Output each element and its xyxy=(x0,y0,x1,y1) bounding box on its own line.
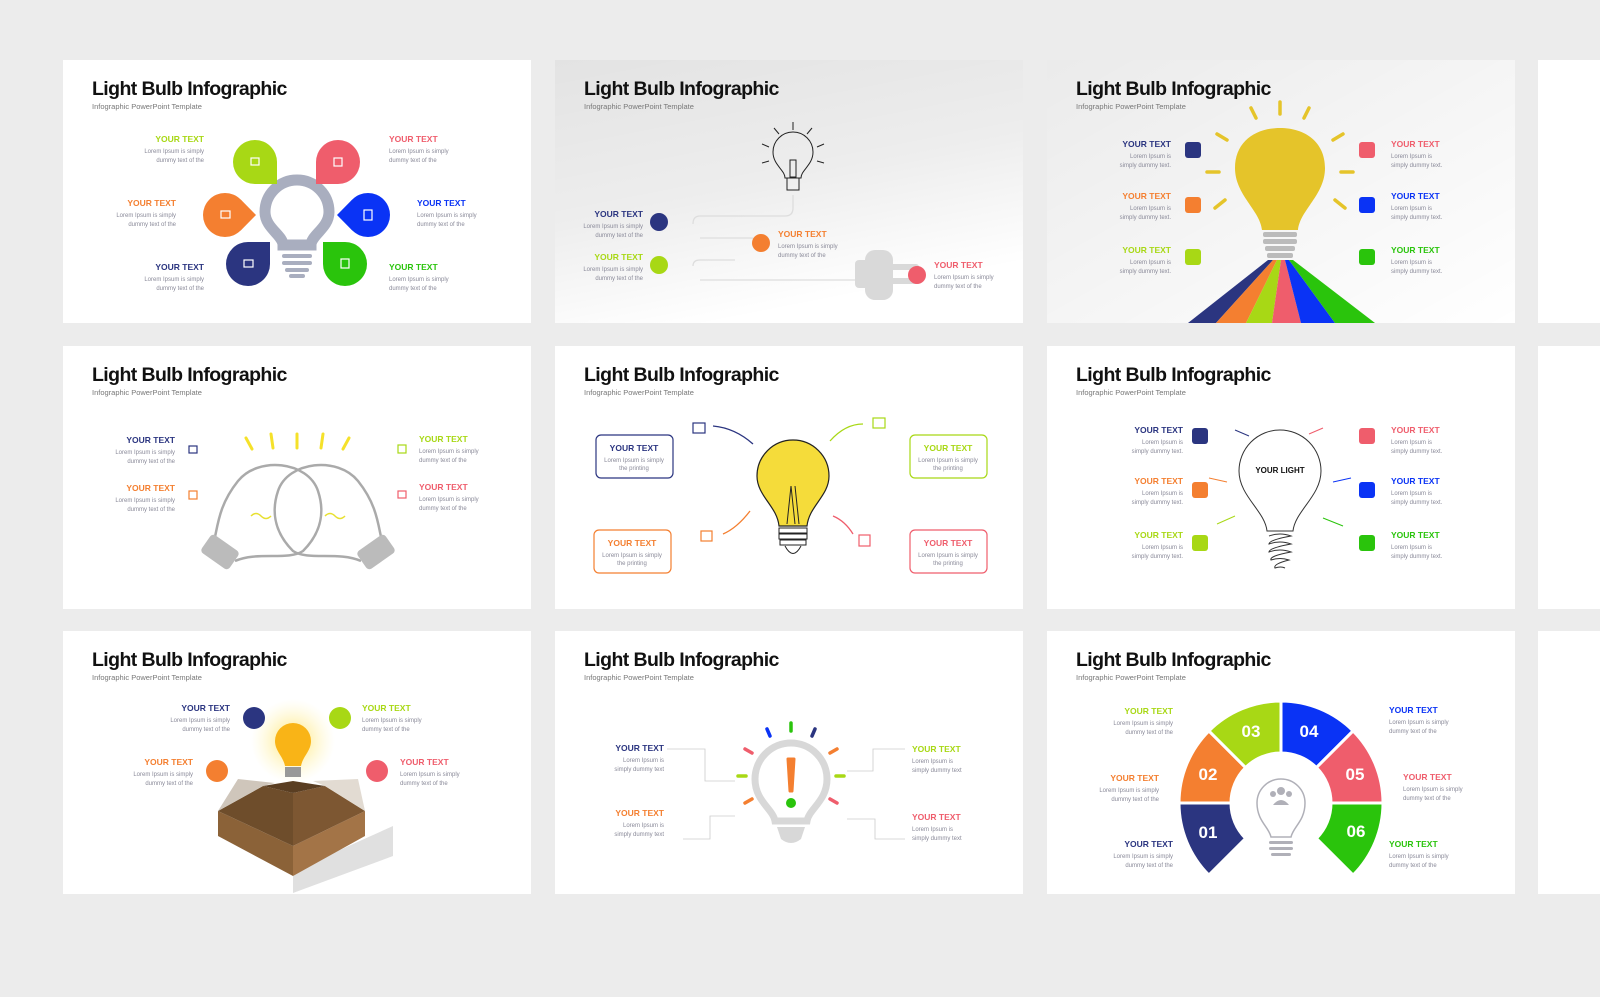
text blocks: Lorem Ipsum is simply xyxy=(144,277,204,283)
text blocks: Lorem Ipsum is xyxy=(912,827,953,833)
text blocks: dummy text of the xyxy=(419,458,467,464)
text blocks: dummy text of the xyxy=(182,727,231,733)
rays xyxy=(738,723,844,803)
outline bulb xyxy=(762,122,824,190)
text blocks xyxy=(1099,705,1463,869)
text blocks: dummy text of the xyxy=(128,222,177,228)
plug xyxy=(855,250,919,300)
text blocks: YOUR TEXT xyxy=(181,703,231,713)
text blocks: simply dummy text xyxy=(912,836,962,842)
slide 8: exclamation bulb xyxy=(555,631,1023,894)
title: Infographic PowerPoint Template xyxy=(92,673,202,682)
text blocks: Lorem Ipsum is xyxy=(1130,260,1171,266)
title: Infographic PowerPoint Template xyxy=(92,102,202,111)
title: Infographic PowerPoint Template xyxy=(584,102,694,111)
text blocks: YOUR TEXT xyxy=(155,262,205,272)
text blocks: simply dummy text. xyxy=(1391,449,1443,455)
text blocks: YOUR TEXT xyxy=(362,703,411,713)
title: Infographic PowerPoint Template xyxy=(1076,102,1186,111)
text blocks: YOUR TEXT xyxy=(1124,706,1174,716)
bulb xyxy=(755,743,827,843)
text blocks: YOUR TEXT xyxy=(1403,772,1452,782)
text blocks: the printing xyxy=(619,466,649,472)
text blocks: the printing xyxy=(933,466,963,472)
text blocks: YOUR TEXT xyxy=(912,744,961,754)
text blocks: YOUR TEXT xyxy=(400,757,449,767)
numbers: 05 xyxy=(1346,765,1364,784)
boxes xyxy=(594,435,987,573)
numbers: 03 xyxy=(1242,722,1260,741)
box xyxy=(218,779,393,893)
text blocks: YOUR TEXT xyxy=(610,443,659,453)
title: Infographic PowerPoint Template xyxy=(1076,388,1186,397)
text blocks: YOUR TEXT xyxy=(389,134,438,144)
squares xyxy=(1192,428,1375,551)
text blocks: YOUR TEXT xyxy=(1134,476,1184,486)
text blocks: YOUR TEXT xyxy=(615,743,665,753)
text blocks: simply dummy text. xyxy=(1120,269,1171,275)
text blocks: Lorem Ipsum is simply xyxy=(417,213,477,219)
text blocks: simply dummy text. xyxy=(1391,215,1443,221)
title xyxy=(584,649,780,682)
text blocks: Lorem Ipsum is simply xyxy=(604,458,664,464)
text blocks xyxy=(602,443,978,567)
text blocks: YOUR TEXT xyxy=(1122,245,1172,255)
text blocks: simply dummy text. xyxy=(1132,449,1183,455)
title: Light Bulb Infographic xyxy=(92,78,288,100)
text blocks: YOUR TEXT xyxy=(615,808,665,818)
slide 1: petal bulb xyxy=(63,60,531,323)
text blocks: YOUR TEXT xyxy=(1122,191,1172,201)
text blocks: dummy text of the xyxy=(778,253,826,259)
slide 3: yellow bulb with rainbow road xyxy=(1047,60,1515,323)
slide 2: bulb with plug xyxy=(555,60,1023,323)
text blocks: Lorem Ipsum is simply xyxy=(1389,720,1449,726)
text blocks: Lorem Ipsum is xyxy=(1391,260,1432,266)
bulb xyxy=(1239,430,1321,568)
text blocks: Lorem Ipsum is xyxy=(1391,545,1432,551)
text blocks: Lorem Ipsum is simply xyxy=(1113,854,1173,860)
squares xyxy=(1185,142,1375,265)
text blocks: YOUR TEXT xyxy=(1124,839,1174,849)
text blocks: YOUR TEXT xyxy=(924,443,973,453)
text blocks xyxy=(614,743,962,842)
text blocks: Lorem Ipsum is simply xyxy=(419,449,479,455)
icons xyxy=(693,418,885,546)
text blocks: Lorem Ipsum is xyxy=(1391,206,1432,212)
text blocks: dummy text of the xyxy=(1125,863,1174,869)
title xyxy=(584,78,780,111)
title: Infographic PowerPoint Template xyxy=(92,388,202,397)
text blocks: Lorem Ipsum is xyxy=(1142,440,1183,446)
text blocks: Lorem Ipsum is simply xyxy=(115,450,175,456)
text blocks: Lorem Ipsum is simply xyxy=(389,277,449,283)
text blocks: simply dummy text xyxy=(912,768,962,774)
glow and bulb xyxy=(251,699,335,783)
center bulb xyxy=(1257,779,1305,856)
numbers: 01 xyxy=(1199,823,1217,842)
text blocks: YOUR TEXT xyxy=(912,812,961,822)
text blocks: dummy text of the xyxy=(156,286,205,292)
rays xyxy=(246,434,349,449)
title xyxy=(92,78,288,111)
text blocks: dummy text of the xyxy=(362,727,410,733)
text blocks: YOUR TEXT xyxy=(417,198,466,208)
text blocks: dummy text of the xyxy=(417,222,465,228)
slide 9: numbered semicircle xyxy=(1047,631,1515,894)
text blocks: Lorem Ipsum is simply xyxy=(419,497,479,503)
text blocks: Lorem Ipsum is xyxy=(1391,154,1432,160)
text blocks: YOUR TEXT xyxy=(1391,530,1440,540)
text blocks: simply dummy text. xyxy=(1391,500,1443,506)
text blocks: simply dummy text. xyxy=(1132,554,1183,560)
text blocks: Lorem Ipsum is simply xyxy=(602,553,662,559)
text blocks: YOUR TEXT xyxy=(126,483,176,493)
text blocks: Lorem Ipsum is simply xyxy=(1113,721,1173,727)
text blocks: simply dummy text. xyxy=(1391,163,1443,169)
text blocks: dummy text of the xyxy=(127,507,176,513)
title: Light Bulb Infographic xyxy=(584,364,780,386)
text blocks: Lorem Ipsum is xyxy=(912,759,953,765)
title: Light Bulb Infographic xyxy=(92,649,288,671)
text blocks: the printing xyxy=(933,561,963,567)
title xyxy=(92,649,288,682)
text blocks: Lorem Ipsum is xyxy=(1142,545,1183,551)
text blocks: YOUR TEXT xyxy=(127,198,177,208)
text blocks: Lorem Ipsum is xyxy=(1391,440,1432,446)
text blocks: YOUR TEXT xyxy=(1134,425,1184,435)
text blocks: dummy text of the xyxy=(1389,729,1437,735)
text blocks: dummy text of the xyxy=(156,158,205,164)
bulbs xyxy=(213,465,383,561)
rainbow road xyxy=(1188,260,1375,323)
text blocks: Lorem Ipsum is simply xyxy=(144,149,204,155)
text blocks: YOUR TEXT xyxy=(144,757,194,767)
text blocks: Lorem Ipsum is simply xyxy=(918,553,978,559)
title xyxy=(1076,649,1272,682)
title xyxy=(1076,78,1272,111)
text blocks: YOUR TEXT xyxy=(1389,705,1438,715)
text blocks: YOUR TEXT xyxy=(1391,476,1440,486)
text blocks: YOUR TEXT xyxy=(1391,425,1440,435)
segments xyxy=(1179,701,1383,875)
text blocks: simply dummy text. xyxy=(1391,554,1443,560)
text blocks: dummy text of the xyxy=(595,233,644,239)
text blocks: Lorem Ipsum is xyxy=(1130,154,1171,160)
numbers xyxy=(1199,722,1365,842)
title: Infographic PowerPoint Template xyxy=(584,388,694,397)
numbers: 04 xyxy=(1300,722,1319,741)
title xyxy=(584,364,780,397)
text blocks: dummy text of the xyxy=(400,781,448,787)
text blocks: simply dummy text. xyxy=(1120,215,1171,221)
circles xyxy=(206,707,388,782)
text blocks: YOUR TEXT xyxy=(419,482,468,492)
text blocks: Lorem Ipsum is xyxy=(1142,491,1183,497)
circles xyxy=(650,213,926,284)
text blocks: YOUR TEXT xyxy=(924,538,973,548)
text blocks: Lorem Ipsum is simply xyxy=(1389,854,1449,860)
text blocks: dummy text of the xyxy=(934,284,982,290)
title: Light Bulb Infographic xyxy=(1076,649,1272,671)
text blocks: YOUR TEXT xyxy=(126,435,176,445)
text blocks xyxy=(583,209,994,290)
title: Light Bulb Infographic xyxy=(1076,78,1272,100)
text blocks: dummy text of the xyxy=(595,276,644,282)
text blocks: Lorem Ipsum is simply xyxy=(583,267,643,273)
text blocks: YOUR TEXT xyxy=(778,229,827,239)
slide 4: two bulbs xyxy=(63,346,531,609)
text blocks: YOUR TEXT xyxy=(594,209,644,219)
text blocks: Lorem Ipsum is simply xyxy=(115,498,175,504)
text blocks: the printing xyxy=(617,561,647,567)
text blocks: dummy text of the xyxy=(1389,863,1437,869)
text blocks xyxy=(115,434,479,513)
title: Light Bulb Infographic xyxy=(1076,364,1272,386)
text blocks: YOUR TEXT xyxy=(608,538,657,548)
text blocks: simply dummy text. xyxy=(1132,500,1183,506)
slide 6: your light outline bulb xyxy=(1047,346,1515,609)
numbers: 02 xyxy=(1199,765,1217,784)
bulb: YOUR LIGHT xyxy=(1255,466,1305,475)
text blocks: YOUR TEXT xyxy=(1391,139,1440,149)
title: Infographic PowerPoint Template xyxy=(584,673,694,682)
text blocks: Lorem Ipsum is simply xyxy=(389,149,449,155)
text blocks: YOUR TEXT xyxy=(1391,245,1440,255)
ray strokes xyxy=(1209,428,1351,526)
text blocks: Lorem Ipsum is xyxy=(1391,491,1432,497)
petals xyxy=(203,140,390,286)
connectors xyxy=(667,749,905,839)
title: Infographic PowerPoint Template xyxy=(1076,673,1186,682)
text blocks: YOUR TEXT xyxy=(419,434,468,444)
text blocks: Lorem Ipsum is simply xyxy=(934,275,994,281)
text blocks: dummy text of the xyxy=(1111,797,1160,803)
text blocks: YOUR TEXT xyxy=(1110,773,1160,783)
bulb xyxy=(265,180,329,245)
bulb xyxy=(757,440,829,554)
text blocks: YOUR TEXT xyxy=(1134,530,1184,540)
text blocks: dummy text of the xyxy=(389,286,437,292)
text blocks: Lorem Ipsum is xyxy=(623,758,664,764)
text blocks: dummy text of the xyxy=(127,459,176,465)
text blocks: dummy text of the xyxy=(1403,796,1451,802)
text blocks: Lorem Ipsum is simply xyxy=(778,244,838,250)
text blocks: YOUR TEXT xyxy=(389,262,438,272)
text blocks xyxy=(133,703,460,787)
text blocks: Lorem Ipsum is simply xyxy=(170,718,230,724)
title: Light Bulb Infographic xyxy=(584,649,780,671)
title: Light Bulb Infographic xyxy=(584,78,780,100)
rays xyxy=(1207,102,1353,208)
text blocks: Lorem Ipsum is simply xyxy=(1403,787,1463,793)
slide 5: sketch bulb with boxes xyxy=(555,346,1023,609)
text blocks: YOUR TEXT xyxy=(1122,139,1172,149)
text blocks: YOUR TEXT xyxy=(155,134,205,144)
text blocks: dummy text of the xyxy=(389,158,437,164)
partial slides at right edge xyxy=(1538,60,1600,894)
text blocks: Lorem Ipsum is simply xyxy=(362,718,422,724)
icons xyxy=(189,445,406,499)
connector lines xyxy=(693,195,855,280)
text blocks: Lorem Ipsum is xyxy=(1130,206,1171,212)
title xyxy=(1076,364,1272,397)
text blocks: Lorem Ipsum is simply xyxy=(1099,788,1159,794)
slide 7: bulb in box xyxy=(63,631,531,894)
text blocks: Lorem Ipsum is simply xyxy=(583,224,643,230)
text blocks: Lorem Ipsum is simply xyxy=(116,213,176,219)
text blocks: Lorem Ipsum is xyxy=(623,823,664,829)
text blocks: simply dummy text xyxy=(614,832,664,838)
text blocks: simply dummy text. xyxy=(1120,163,1171,169)
text blocks: YOUR TEXT xyxy=(1391,191,1440,201)
text blocks: Lorem Ipsum is simply xyxy=(918,458,978,464)
title: Light Bulb Infographic xyxy=(92,364,288,386)
numbers: 06 xyxy=(1347,822,1365,841)
text blocks: Lorem Ipsum is simply xyxy=(133,772,193,778)
text blocks xyxy=(1120,139,1443,275)
text blocks: simply dummy text xyxy=(614,767,664,773)
text blocks: YOUR TEXT xyxy=(1389,839,1438,849)
text blocks: YOUR TEXT xyxy=(594,252,644,262)
text blocks xyxy=(116,134,477,292)
text blocks: simply dummy text. xyxy=(1391,269,1443,275)
text blocks: YOUR TEXT xyxy=(934,260,983,270)
arrows xyxy=(713,424,863,534)
text blocks: Lorem Ipsum is simply xyxy=(400,772,460,778)
bulb xyxy=(1235,128,1325,258)
text blocks: dummy text of the xyxy=(419,506,467,512)
title xyxy=(92,364,288,397)
text blocks: dummy text of the xyxy=(145,781,194,787)
text blocks xyxy=(1132,425,1443,560)
text blocks: dummy text of the xyxy=(1125,730,1174,736)
